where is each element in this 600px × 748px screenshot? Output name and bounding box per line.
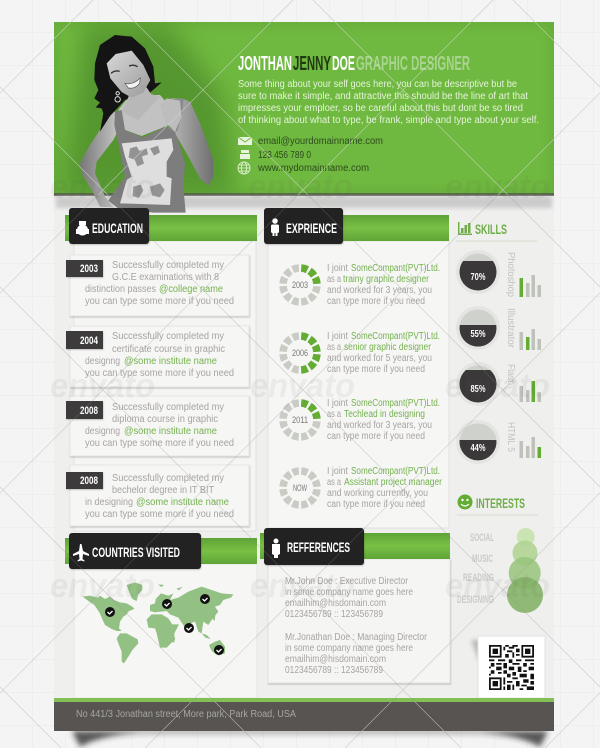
name and job title: JENNY [293,53,331,75]
education entry 2008 degree: @some institute name [136,497,229,508]
experience entry 2003: SomeCompant(PVT)Ltd. [351,263,440,274]
education entry 2003: you can type some more if you need [85,296,234,307]
skill illustrator 55% [456,306,541,350]
about paragraph: impresses your emploer, so be careful about this but dont be so tired [238,103,523,114]
experience entry 2011: Techlead in designing [344,409,425,420]
experience entry 2011: as a [327,409,341,420]
skill flash 85% [456,362,541,406]
skill bars photoshop [520,275,541,297]
experience entry now: and working currently, you [327,488,428,499]
panel: education [65,208,257,531]
skill photoshop 70%: 70% [470,272,486,283]
experience heading [264,208,449,244]
watermarks: envato [445,567,550,605]
header banner [54,22,554,208]
watermarks: envato [250,567,355,605]
watermarks: envato [445,367,550,405]
reference Jonathan Doe: Mr.Jonathan Doe : Managing Director [285,632,428,643]
contact details [238,136,383,174]
education entry 2004: 2004 [80,335,99,347]
about paragraph: Some thing about your self goes here, you can be descriptive but be [238,79,517,90]
reference John Doe: Mr.John Doe : Executive Director [285,576,409,587]
experience entry 2006: can type more if you need [327,364,425,375]
education entry 2008 degree: you can type some more if you need [85,509,234,520]
icon: envelope [238,137,252,145]
panel: countries visited [65,533,257,698]
education entry 2004: @some institute name [124,356,217,367]
interest labels: READING [463,572,494,584]
interest labels: SOCIAL [470,532,494,544]
education entry 2008 diploma [66,396,249,456]
education entry 2008 diploma: @some institute name [124,426,217,437]
progress ring now [283,471,317,505]
watermarks: envato [250,367,355,405]
name and job title: JONTHAN [238,53,292,75]
education entry 2003: G.C.E examinations with 8 [112,272,219,283]
watermarks: envato [50,367,155,405]
education entry 2003: @college name [159,284,223,295]
about paragraph [238,79,539,126]
portrait eyes and smile [111,65,140,88]
skill illustrator 55%: Illustrator [505,308,516,349]
reference Jonathan Doe: emailhim@hisdomain.com [285,654,386,665]
icon: medal [76,221,89,236]
icon: person with tie [272,538,280,558]
experience entry 2003 [283,263,440,307]
skill flash 85%: Flash [505,364,516,385]
experience entry 2003: as a [327,274,341,285]
portrait chest [118,95,173,136]
skill bars illustrator [520,329,541,350]
skill photoshop 70%: Photoshop [505,252,516,297]
icon: telephone [240,150,250,159]
portrait arm left [80,112,118,207]
panel: skills [456,221,541,464]
icon: person [271,218,279,236]
portrait: woman in tank top [80,35,213,213]
watermarks: envato [248,168,353,206]
experience entry now: as a [327,477,341,488]
education entry 2008 diploma: 2008 [80,405,98,417]
education entry 2004: you can type some more if you need [85,368,234,379]
name and job title: GRAPHIC DESIGNER [356,53,470,75]
experience heading: EXPRIENCE [286,220,337,236]
portrait face [107,51,150,98]
progress ring now: NOW [293,483,307,493]
footer: No 441/3 Jonathan street, More park, Park Road, USA [76,709,296,720]
check markers [105,594,224,655]
reference John Doe: 0123456789 :: 123456789 [285,609,383,620]
education entry 2008 degree: Successfully completed my [112,473,224,484]
contact details: 123 456 789 0 [258,150,311,161]
education entry 2004: Successfully completed my [112,331,224,342]
interest labels: MUSIC [472,553,493,565]
interest labels: DESIGNING [457,594,494,606]
interests heading: INTERESTS [476,495,525,511]
education entry 2004 [66,326,249,387]
contact details: email@yourdomainname.com [258,136,383,147]
references heading [260,528,450,565]
footer [54,698,554,731]
education entry 2004: certificate course in graphic [112,344,225,355]
progress ring 2006 [283,336,317,370]
skills heading: SKILLS [475,221,507,237]
interest labels [457,532,494,606]
name and job title: DOE [332,53,355,75]
reference Jonathan Doe: in some company name goes here [285,643,413,654]
education entry 2008 degree: in designing [85,497,133,508]
about paragraph: sure to make it simple, and attractive this should be the line of art that [238,91,528,102]
skill html5 44% [456,420,541,464]
skill photoshop 70% [456,250,541,297]
skill bars flash [520,381,541,402]
portrait hand [160,98,182,132]
education entry 2003: distinction passes [85,284,156,295]
experience entry now: Assistant project manager [344,477,443,488]
panel: references [260,528,450,683]
education heading: EDUCATION [92,220,143,236]
portrait neck [122,87,160,120]
skill flash 85%: 85% [470,384,486,395]
portrait print [120,138,173,205]
education entry 2008 diploma: diploma course in graphic [112,414,218,425]
progress ring 2011 [283,403,317,437]
education entry 2008 degree: bechelor degree in IT BIT [112,485,214,496]
icon: bar chart [458,222,472,235]
about paragraph: of thinking about what to type, be frank, simple and type about your self. [238,115,539,126]
skill html5 44%: HTML 5 [505,422,516,452]
countries heading: COUNTRIES VISITED [92,544,180,560]
experience entry 2011: SomeCompant(PVT)Ltd. [351,398,440,409]
watermarks: envato [50,567,155,605]
experience entry now: SomeCompant(PVT)Ltd. [351,466,440,477]
portrait arm right [160,98,213,186]
name and job title [238,53,470,75]
references heading: REFFERENCES [287,539,350,555]
experience entry now: I joint [327,466,348,477]
experience entry 2003: can type more if you need [327,296,425,307]
education heading [65,208,257,244]
education entry 2003 [66,255,249,316]
experience entry 2006: and worked for 5 years, you [327,353,432,364]
experience entry 2011: and worked for 3 years, you [327,420,432,431]
experience entry 2006: senior graphic designer [344,342,432,353]
experience entry 2011 [283,398,440,442]
experience entry 2006: SomeCompant(PVT)Ltd. [351,331,440,342]
progress ring 2006: 2006 [292,348,308,358]
panel: experience [264,208,449,528]
experience entry 2003: I joint [327,263,348,274]
portrait tank top [108,110,186,213]
education entry 2008 diploma: designng [85,426,120,437]
watermarks: envato [50,168,155,206]
experience entry 2006 [283,331,440,375]
education entry 2008 degree [66,465,249,526]
skills heading [456,221,537,242]
reference Jonathan Doe: 0123456789 :: 123456789 [285,665,383,676]
experience entry 2011: can type more if you need [327,431,425,442]
progress ring 2003 [283,268,317,302]
world map [83,582,233,663]
watermarks [50,168,550,605]
experience entry now [283,466,443,510]
skill bars html5 [520,437,541,458]
education entry 2008 diploma: you can type some more if you need [85,438,234,449]
experience entry 2011: I joint [327,398,348,409]
experience entry 2006: as a [327,342,341,353]
education entry 2008 diploma: Successfully completed my [112,402,224,413]
page drop shadow [72,731,548,747]
reference Jonathan Doe [285,632,428,676]
progress ring 2003: 2003 [292,280,308,290]
reference John Doe: emailhim@hisdomain.com [285,598,386,609]
QR code [489,645,534,690]
progress ring 2011: 2011 [292,415,308,425]
skill illustrator 55%: 55% [470,329,486,340]
reference John Doe: in some company name goes here [285,587,413,598]
icon: smiley [458,494,472,510]
icon: globe [238,162,250,174]
countries heading [65,533,257,569]
experience entry now: can type more if you need [327,499,425,510]
QR code card [471,636,545,698]
panel: interests [457,494,543,613]
icon: airplane [73,544,89,562]
experience entry 2003: and worked for 3 years, you [327,285,432,296]
contact details: www.mydomainname.com [257,163,369,174]
education entry 2008 degree: 2008 [80,475,98,487]
watermarks: envato [445,168,550,206]
portrait hair [94,35,162,132]
education entry 2003: 2003 [80,263,98,275]
portrait earring [115,92,120,102]
portrait strap [168,98,184,132]
experience entry 2006: I joint [327,331,348,342]
interest bubbles [507,528,543,613]
experience entry 2003: trainy graphic designer [343,274,430,285]
skill html5 44%: 44% [470,443,486,454]
reference John Doe [285,576,413,620]
education entry 2003: Successfully completed my [112,260,224,271]
education entry 2004: designng [85,356,120,367]
